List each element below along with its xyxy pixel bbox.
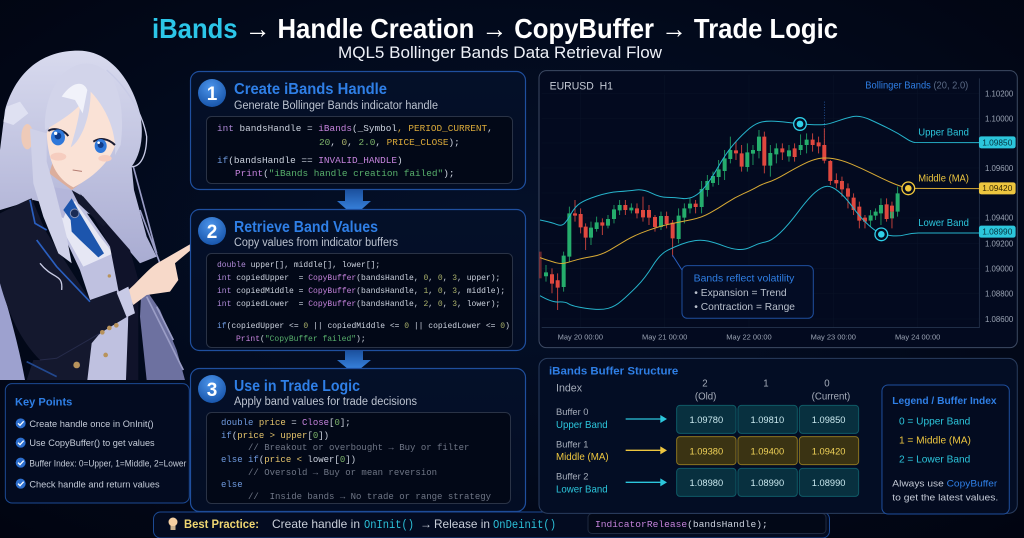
legend: buffer index: 2 = Lower Band: [899, 455, 970, 466]
time axis labels: May 21 00:00: [642, 332, 687, 341]
chart header: indicator: Bollinger Bands (20, 2.0): [865, 81, 968, 92]
price tag: middle: 1.09420: [982, 183, 1013, 193]
row: buffer 1 middle: 1.09380: [689, 446, 723, 456]
price axis labels: [985, 89, 1014, 324]
code block: step 3: if(price > upper[0]): [221, 431, 329, 441]
callout: volatility: • Contraction = Range: [694, 302, 795, 313]
code block: step 2: int copiedUpper = CopyBuffer(bandsHandle, 0, 0, 3, upper);: [217, 274, 500, 283]
price axis labels: 1.10200: [985, 89, 1014, 98]
code block: step 3: [206, 412, 510, 504]
price tag: lower: [979, 226, 1016, 238]
lower band line: [540, 186, 980, 309]
heading: step 2: Retrieve Band Values: [234, 219, 378, 236]
candlesticks: [539, 128, 900, 310]
legend: buffer index: [882, 385, 1009, 514]
panel: step 3 trade logic: [190, 368, 526, 512]
heading: step 1: Create iBands Handle: [234, 81, 387, 98]
label: lower band: Lower Band: [918, 218, 969, 229]
code block: step 3: else if(price < lower[0]): [221, 455, 356, 465]
label: best practice: Best Practice:: [184, 517, 259, 531]
checklist: [16, 418, 186, 489]
heading: step 3: Use in Trade Logic: [234, 378, 360, 395]
chart header: symbol: EURUSD H1: [550, 80, 613, 92]
row: buffer 2 lower band: Buffer 2: [556, 471, 588, 481]
time axis labels: May 22 00:00: [726, 332, 772, 341]
upper band line: [540, 116, 980, 225]
code block: step 3: // Oversold → Buy or mean reversion: [248, 468, 437, 478]
legend: buffer index: to get the latest values.: [892, 492, 998, 502]
row: buffer 0 upper band: [556, 405, 859, 433]
code block: step 2: int copiedMiddle = CopyBuffer(bandsHandle, 1, 0, 3, middle);: [217, 287, 505, 296]
heading: key points: Key Points: [15, 396, 72, 408]
price axis labels: 1.09600: [985, 164, 1014, 173]
description: step 2: Copy values from indicator buffers: [234, 237, 398, 249]
callout: volatility: [672, 255, 813, 318]
marker: lower touch: [875, 228, 888, 241]
checklist: Use CopyBuffer() to get values: [29, 438, 155, 448]
row: buffer 1 middle: 1.09400: [750, 446, 784, 456]
price axis labels: 1.08800: [985, 290, 1014, 299]
text: create and release: OnInit(): [364, 518, 414, 532]
column headers: Index: [556, 382, 583, 394]
text: create and release: →: [420, 517, 432, 531]
code: indicator release: [588, 514, 826, 534]
code block: step 1: 20, 0, 2.0, PRICE_CLOSE);: [319, 137, 460, 148]
time axis labels: May 24 00:00: [895, 332, 940, 341]
price tag: upper: [979, 136, 1016, 148]
price tag: upper: 1.09850: [982, 137, 1013, 147]
code block: step 1: Print("iBands handle creation failed");: [235, 168, 454, 179]
code block: step 1: if(bandsHandle == INVALID_HANDLE): [217, 155, 403, 166]
step number 2: 2: [207, 222, 217, 243]
code block: step 1: int bandsHandle = iBands(_Symbol, PERIOD_CURRENT,: [217, 123, 493, 134]
row: buffer 1 middle: 1.09420: [812, 446, 846, 456]
checklist: Buffer Index: 0=Upper, 1=Middle, 2=Lower: [29, 458, 186, 468]
icon: light bulb: [168, 518, 178, 530]
code block: step 3: // Breakout or overbought → Buy or filter: [248, 443, 469, 453]
label: upper band: Upper Band: [918, 128, 969, 139]
row: buffer 1 middle: [556, 437, 859, 465]
code: indicator release: IndicatorRelease(bandsHandle);: [595, 519, 768, 530]
step number 3: [198, 375, 226, 403]
row: buffer 0 upper band: 1.09810: [750, 415, 784, 425]
row: buffer 0 upper band: 1.09850: [812, 415, 846, 425]
code block: step 3: // Inside bands → No trade or range strategy: [248, 492, 492, 502]
code block: step 2: int copiedLower = CopyBuffer(bandsHandle, 2, 0, 3, lower);: [217, 300, 500, 309]
price tag: lower: 1.08990: [982, 227, 1013, 237]
panel: step 1 create handle: [190, 72, 526, 190]
marker: middle touch: [902, 182, 915, 195]
column headers: (Old): [695, 392, 716, 403]
heading: buffer structure: iBands Buffer Structure: [549, 366, 678, 378]
label: middle: Middle (MA): [918, 173, 969, 184]
time axis labels: May 20 00:00: [558, 332, 603, 341]
title: iBands → Handle Creation → CopyBuffer → Trade Logic: [152, 13, 838, 44]
price axis labels: 1.10000: [985, 114, 1014, 123]
text: create and release: [272, 517, 556, 532]
legend: buffer index: Legend / Buffer Index: [892, 396, 997, 407]
callout: volatility: • Expansion = Trend: [694, 288, 787, 299]
step number 3: 3: [207, 380, 217, 401]
code block: step 2: [206, 254, 512, 348]
row: buffer 2 lower band: 1.08990: [812, 478, 846, 488]
code block: step 3: else: [221, 480, 243, 490]
row: buffer 2 lower band: 1.08980: [689, 478, 723, 488]
description: step 3: Apply band values for trade decisions: [234, 396, 417, 408]
price tag: middle: [979, 182, 1016, 194]
illustration: presenter character pointing at the steps: [0, 51, 194, 380]
callout: volatility: Bands reflect volatility: [694, 274, 794, 285]
column headers: (Current): [812, 392, 850, 403]
time axis labels: [558, 332, 940, 341]
arrow: step 1 to step 2: [337, 189, 371, 216]
step number 1: [198, 79, 226, 107]
time axis labels: May 23 00:00: [811, 332, 856, 341]
price axis labels: 1.09000: [985, 264, 1014, 273]
checklist: Check handle and return values: [29, 479, 160, 489]
row: buffer 1 middle: Buffer 1: [556, 439, 588, 449]
code block: step 3: double price = Close[0];: [221, 418, 351, 428]
checklist: Create handle once in OnInit(): [29, 419, 154, 429]
best practice bar: [154, 512, 830, 538]
code block: step 2: if(copiedUpper <= 0 || copiedMiddle <= 0 || copiedLower <= 0): [217, 322, 510, 331]
row: buffer 2 lower band: 1.08990: [750, 478, 784, 488]
price axis labels: 1.09400: [985, 214, 1014, 223]
row: buffer 0 upper band: Buffer 0: [556, 407, 588, 417]
price axis labels: 1.08600: [985, 315, 1014, 324]
row: buffer 1 middle: Middle (MA): [556, 452, 609, 463]
row: buffer 2 lower band: Lower Band: [556, 484, 608, 495]
text: create and release: Create handle in: [272, 517, 360, 531]
code block: step 2: double upper[], middle[], lower[];: [217, 261, 380, 270]
panel: price chart: [539, 71, 1017, 348]
column headers: 2: [702, 379, 708, 390]
column headers: 0: [824, 379, 830, 390]
step number 1: 1: [207, 84, 218, 105]
middle band line: [540, 158, 980, 263]
text: create and release: Release in: [434, 517, 490, 531]
row: buffer 0 upper band: Upper Band: [556, 420, 608, 431]
column headers: [556, 379, 850, 403]
marker: upper touch: [794, 118, 806, 130]
panel: key points: [5, 384, 189, 503]
price axis labels: 1.09200: [985, 239, 1014, 248]
row: buffer 0 upper band: 1.09780: [689, 415, 723, 425]
legend: buffer index: 1 = Middle (MA): [899, 436, 971, 447]
step number 2: [198, 217, 226, 245]
subtitle: MQL5 Bollinger Bands Data Retrieval Flow: [338, 44, 662, 62]
panel: buffer structure: [539, 358, 1017, 514]
arrow: step 2 to step 3: [337, 350, 371, 374]
panel: step 2 retrieve values: [190, 210, 526, 350]
text: create and release: OnDeinit(): [493, 518, 556, 532]
column headers: 1: [763, 379, 769, 390]
code block: step 1: [206, 116, 512, 184]
legend: buffer index: 0 = Upper Band: [899, 417, 970, 428]
description: step 1: Generate Bollinger Bands indicator handle: [234, 100, 438, 112]
row: buffer 2 lower band: [556, 468, 859, 496]
legend: buffer index: Always use CopyBuffer: [892, 478, 997, 488]
code block: step 2: Print("CopyBuffer failed");: [236, 335, 366, 344]
